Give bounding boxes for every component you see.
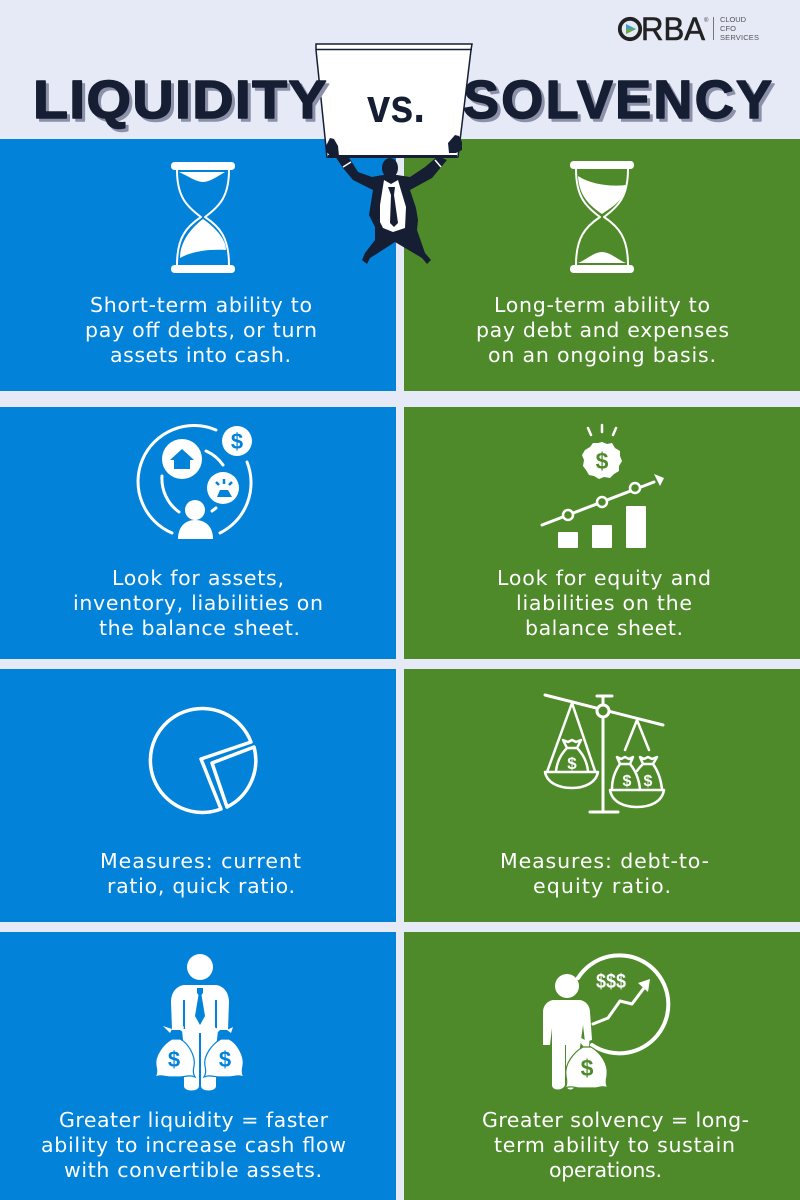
panel: greater solvency	[404, 932, 800, 1200]
icon: person with money bag and rising chart: $	[581, 1055, 594, 1081]
text: solvency definition: on an ongoing basis.	[488, 343, 716, 367]
text: solvency definition: Long-term ability to	[494, 293, 710, 317]
icon: businessman silhouette	[335, 156, 447, 264]
text: solvency definition	[476, 293, 729, 367]
text: greater solvency: term ability to sustain	[494, 1133, 735, 1157]
text: greater solvency	[482, 1108, 749, 1182]
text: liquidity where to look: Look for assets,	[112, 566, 284, 590]
icon: growth chart with dollar badge	[542, 425, 664, 548]
title: SOLVENCY: SOLVENCY	[463, 70, 772, 130]
title: LIQUIDITY: LIQUIDITY	[33, 69, 327, 130]
panel: solvency measures	[404, 669, 800, 922]
text: solvency where to look: balance sheet.	[525, 616, 683, 640]
icon: businessman with two money bags	[155, 954, 244, 1090]
hands	[326, 135, 462, 157]
icon: balance scale with money bags: $	[644, 773, 653, 790]
logo: ORBA cloud CFO services: ®	[704, 17, 709, 24]
panel: greater liquidity	[0, 932, 396, 1200]
text: greater solvency: operations.	[549, 1158, 662, 1182]
icon: assets cycle	[138, 426, 252, 539]
text: liquidity measures: Measures: current	[100, 849, 301, 873]
sign	[316, 44, 472, 158]
icon: hourglass mostly full	[570, 161, 634, 273]
logo: ORBA cloud CFO services: CLOUD	[720, 15, 747, 24]
icon: balance scale with money bags	[545, 695, 664, 812]
panel: liquidity where to look	[0, 407, 396, 659]
illustration: businessman holding up sign	[316, 44, 472, 264]
text: liquidity definition: pay off debts, or turn	[85, 318, 317, 342]
icon: person with money bag and rising chart: $$$	[596, 971, 626, 993]
panel: solvency definition	[404, 139, 800, 391]
text: liquidity where to look: inventory, liabilities on	[73, 591, 323, 615]
title: SOLVENCY: SOLVENCY	[466, 73, 775, 133]
icon: assets cycle: $	[231, 429, 243, 454]
panel: liquidity measures	[0, 669, 396, 922]
text: solvency where to look: liabilities on the	[516, 591, 692, 615]
logo: ORBA cloud CFO services: SERVICES	[720, 33, 759, 42]
text: liquidity measures	[100, 849, 301, 898]
text: greater solvency: Greater solvency = long-	[482, 1108, 749, 1132]
text: solvency where to look: Look for equity and	[497, 566, 711, 590]
text: greater liquidity	[41, 1108, 346, 1182]
text: liquidity where to look	[73, 566, 323, 640]
icon: hourglass mostly emptied	[171, 162, 235, 273]
text: solvency measures	[500, 849, 709, 898]
text: liquidity definition: Short-term ability to	[90, 293, 312, 317]
title: vs.: vs.	[367, 79, 425, 132]
icon: balance scale with money bags: $	[623, 773, 632, 790]
text: liquidity definition: assets into cash.	[110, 343, 291, 367]
icon: balance scale with money bags: $	[567, 754, 577, 773]
icon: pie chart	[150, 708, 256, 812]
logo: ORBA cloud CFO services: RBA	[641, 11, 706, 47]
text: solvency measures: Measures: debt-to-	[500, 849, 709, 873]
panel: liquidity definition	[0, 139, 396, 391]
text: liquidity measures: ratio, quick ratio.	[107, 874, 295, 898]
icon: businessman with two money bags: $	[219, 1047, 231, 1072]
icon: businessman with two money bags: $	[168, 1047, 180, 1072]
text: greater liquidity: ability to increase cash flow	[41, 1133, 346, 1157]
panel: solvency where to look	[404, 407, 800, 659]
text: liquidity definition	[85, 293, 317, 367]
logo: ORBA cloud CFO services: CFO	[720, 24, 736, 33]
text: solvency definition: pay debt and expenses	[476, 318, 729, 342]
title: LIQUIDITY: LIQUIDITY	[36, 72, 330, 133]
text: solvency measures: equity ratio.	[533, 874, 671, 898]
logo: ORBA cloud CFO services	[620, 11, 759, 47]
icon: person with money bag and rising chart	[543, 955, 668, 1090]
icon: growth chart with dollar badge: $	[596, 448, 609, 474]
text: solvency where to look	[497, 566, 711, 640]
text: liquidity where to look: the balance sheet.	[99, 616, 300, 640]
text: greater liquidity: with convertible assets.	[64, 1158, 322, 1182]
text: greater liquidity: Greater liquidity = faster	[59, 1108, 329, 1132]
